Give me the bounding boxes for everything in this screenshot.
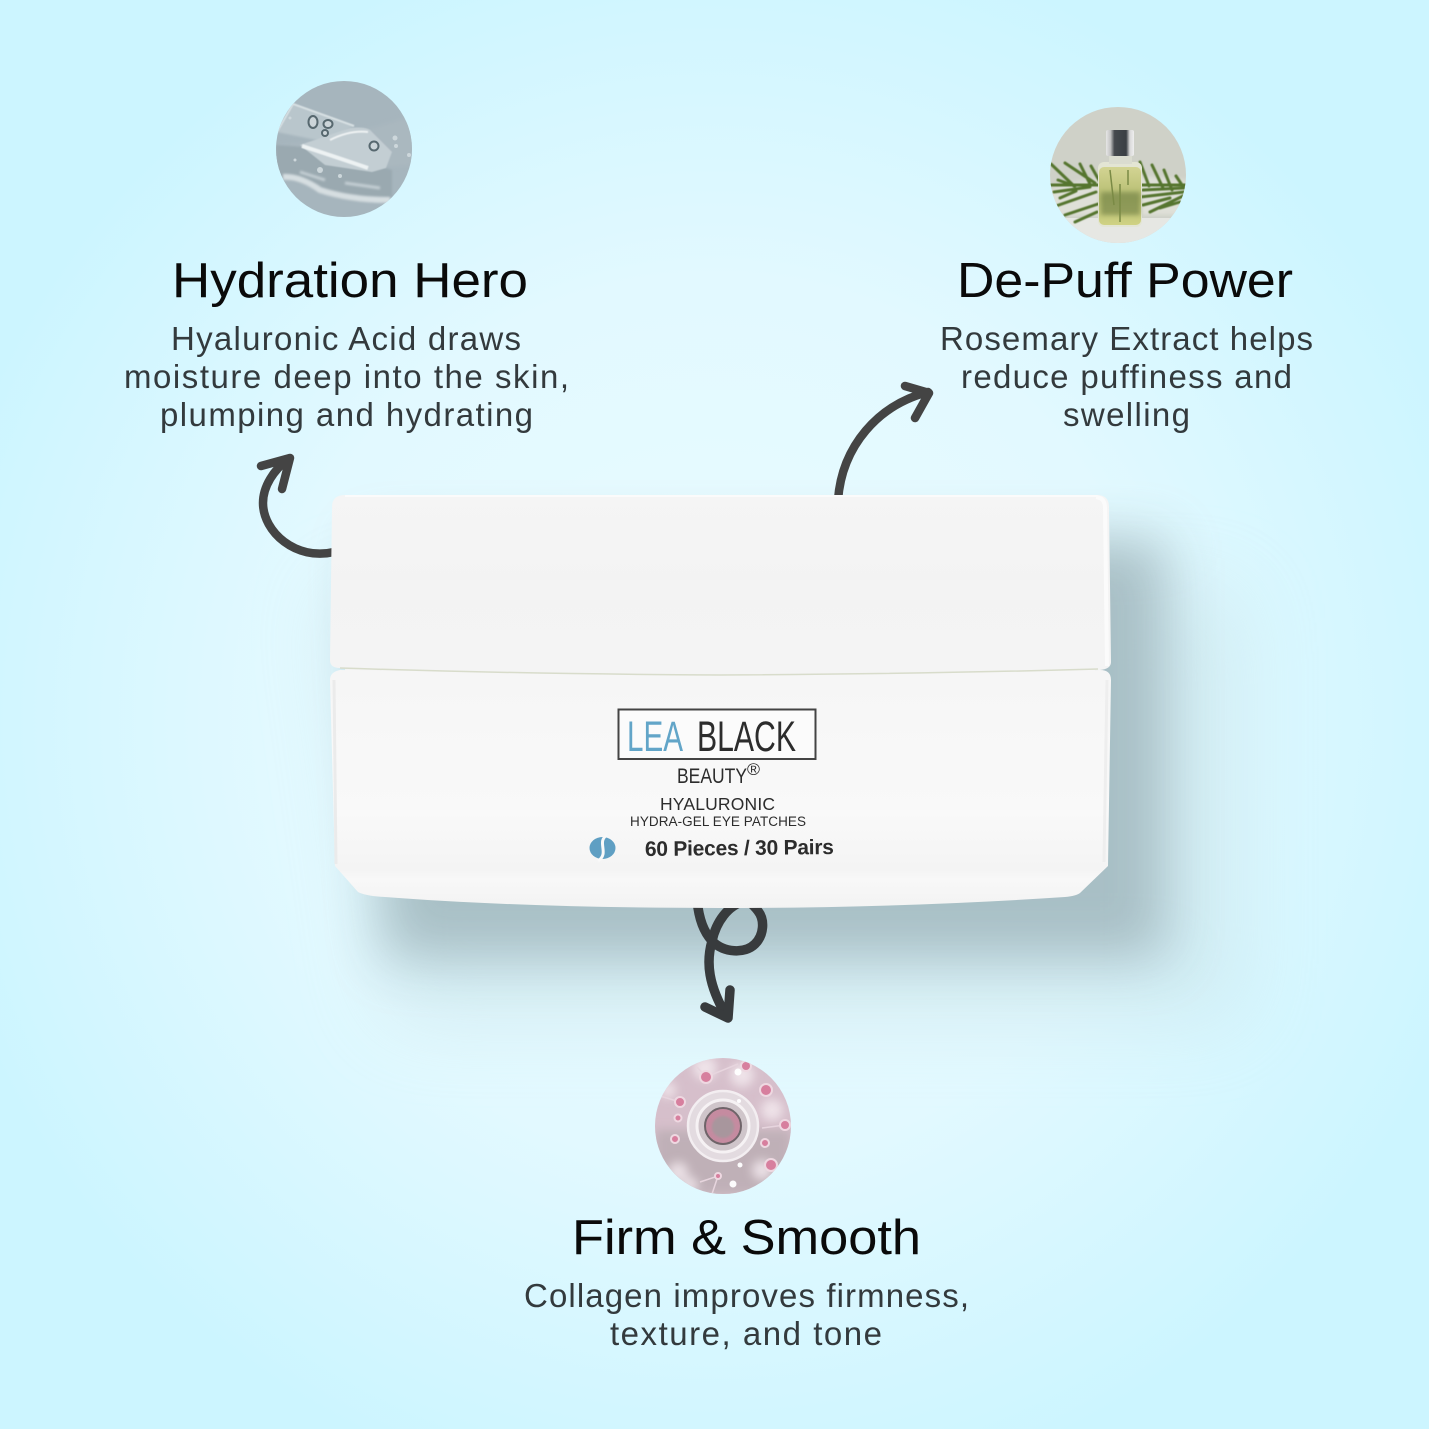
jar shadow [330, 540, 1240, 1020]
bottle [1098, 162, 1142, 227]
description: Hyaluronic Acid draws [171, 320, 521, 357]
description: Collagen improves firmness, [524, 1277, 969, 1314]
product label: HYALURONIC [660, 794, 775, 814]
photo: hyaluronic gel [276, 81, 412, 217]
puddle [276, 145, 392, 201]
feature: de-puff power [940, 254, 1313, 433]
photo: rosemary oil [1050, 107, 1186, 244]
feature: firm and smooth [524, 1211, 969, 1352]
arrow: de-puff [838, 386, 929, 500]
description: swelling [1063, 396, 1190, 433]
bubbles [308, 116, 378, 150]
jar [330, 495, 1111, 908]
gel blob [300, 128, 392, 172]
jar base [330, 670, 1111, 908]
feature: hydration hero [124, 254, 569, 433]
product label: LEA [627, 713, 683, 761]
heading: Hydration Hero [172, 254, 528, 308]
description [124, 320, 569, 433]
description [940, 320, 1313, 433]
icon: logo mark [590, 835, 616, 861]
arrow: firm [697, 900, 763, 1018]
product label: BLACK [697, 713, 796, 761]
description: reduce puffiness and [961, 358, 1292, 395]
arrow: hydration [261, 458, 334, 554]
description: plumping and hydrating [160, 396, 533, 433]
description: Rosemary Extract helps [940, 320, 1313, 357]
jar lid [330, 495, 1111, 675]
product label: ® [747, 760, 760, 779]
product label: 60 Pieces / 30 Pairs [645, 836, 834, 861]
pipette [278, 106, 352, 140]
product label: HYDRA-GEL EYE PATCHES [630, 814, 806, 829]
description: texture, and tone [610, 1315, 882, 1352]
product label: BEAUTY [677, 765, 747, 788]
heading: De-Puff Power [957, 254, 1293, 308]
description: moisture deep into the skin, [124, 358, 569, 395]
description [524, 1277, 969, 1352]
heading: Firm & Smooth [572, 1211, 921, 1265]
product label [590, 710, 834, 861]
photo: collagen [655, 1056, 791, 1194]
